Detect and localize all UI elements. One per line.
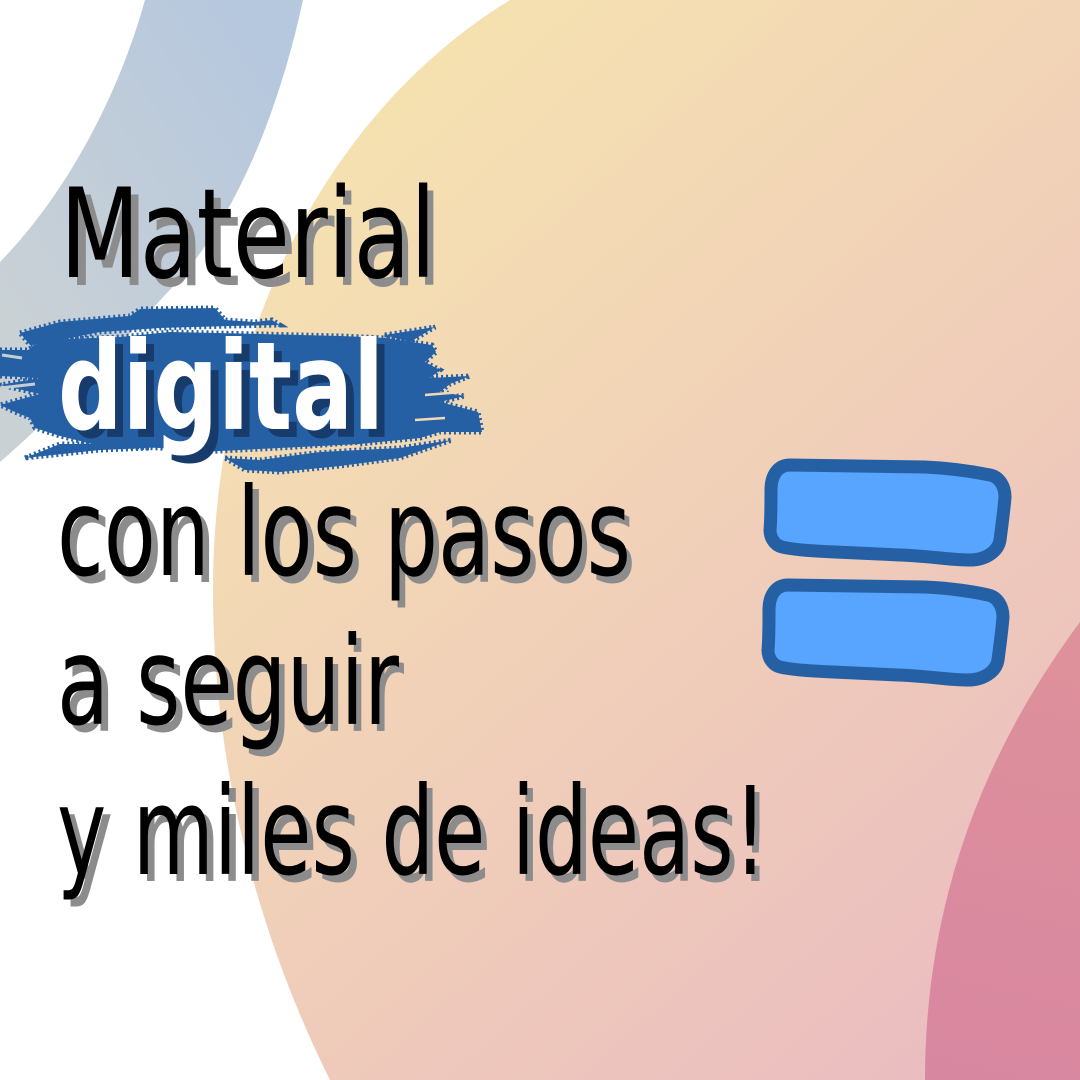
heading line: Material: Material	[60, 163, 436, 307]
heading line: y miles de ideas!	[57, 761, 772, 910]
heading line: a seguir: a seguir	[64, 618, 405, 760]
heading line: con los pasos: con los pasos	[57, 462, 631, 604]
background arc: blue-grey	[0, 0, 303, 462]
icon: equals sign	[768, 465, 1005, 680]
heading line: con los pasos	[57, 462, 636, 611]
heading line: Material: Material	[68, 171, 442, 315]
brush stroke behind the word digital	[0, 308, 482, 472]
heading line: digital (highlighted): digital	[58, 316, 384, 458]
icon: lower bar of equals	[768, 585, 1003, 680]
heading line: y miles de ideas!: y miles de ideas!	[57, 761, 767, 903]
heading line: y miles de ideas!: y miles de ideas!	[64, 768, 772, 910]
icon: upper bar of equals	[770, 465, 1005, 560]
heading line: a seguir	[57, 611, 405, 760]
background shape: pink arc	[925, 622, 1080, 1080]
heading line: digital (highlighted): digital	[66, 324, 392, 466]
heading line: con los pasos: con los pasos	[64, 469, 636, 611]
heading line: a seguir: a seguir	[57, 611, 400, 753]
